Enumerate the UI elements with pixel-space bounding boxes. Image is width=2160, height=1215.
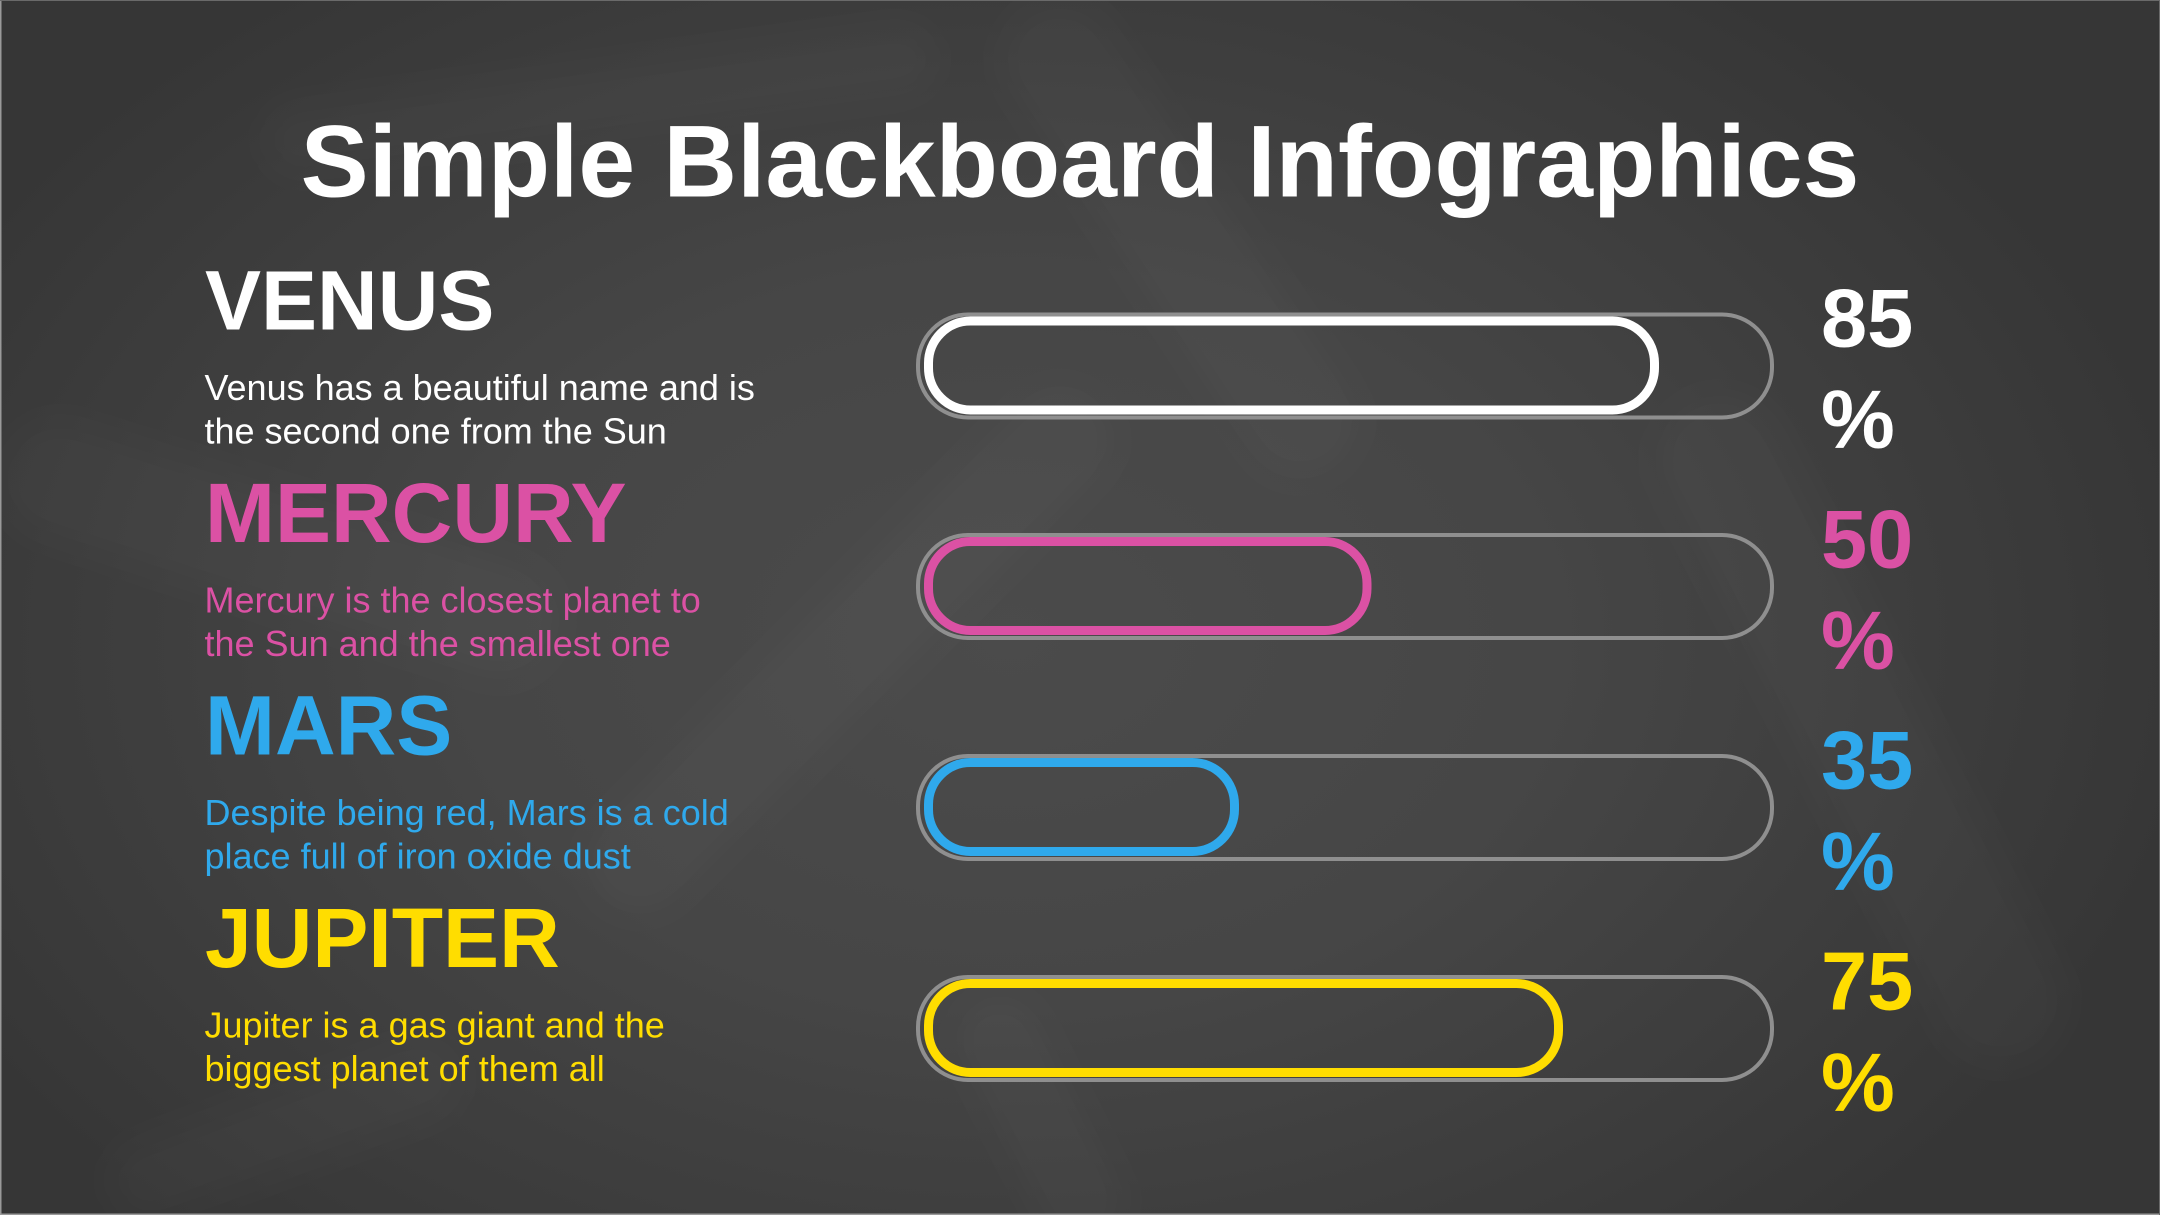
progress bar: Mars 35%: [918, 756, 1772, 859]
value: 85%: %: [1821, 373, 1895, 466]
description: Mars: place full of iron oxide dust: [204, 836, 631, 876]
value: 50%: %: [1821, 594, 1895, 687]
panel: Mars text: [204, 678, 729, 876]
panel: Jupiter text: [204, 891, 665, 1089]
description: Venus: the second one from the Sun: [204, 410, 667, 452]
value: 85%: 85: [1821, 272, 1913, 364]
heading: Venus: VENUS: [205, 254, 494, 348]
progress bar: Mercury 50%: [918, 535, 1772, 638]
description: Mercury: Mercury is the closest planet to: [204, 580, 701, 620]
description: Jupiter: Jupiter is a gas giant and the: [204, 1004, 665, 1046]
description: Mercury: the Sun and the smallest one: [204, 623, 671, 664]
heading: Jupiter: JUPITER: [205, 891, 560, 985]
description: Jupiter: biggest planet of them all: [204, 1048, 605, 1089]
title: Simple Blackboard Infographics: [301, 104, 1859, 218]
progress bar: Jupiter 75%: [918, 977, 1772, 1080]
description: Venus: Venus has a beautiful name and is: [204, 367, 755, 408]
value: 75%: 75: [1821, 934, 1913, 1028]
value: 50%: 50: [1821, 492, 1913, 586]
heading: Mars: MARS: [205, 678, 452, 772]
panel: Venus text: [204, 254, 755, 452]
heading: Mercury: MERCURY: [205, 466, 627, 560]
progress bar: Venus 85%: [918, 314, 1772, 418]
value: 75%: %: [1821, 1036, 1895, 1129]
panel: Mercury text: [204, 466, 701, 664]
description: Mars: Despite being red, Mars is a cold: [204, 792, 729, 833]
value: 35%: %: [1821, 815, 1895, 908]
value: 35%: 35: [1821, 714, 1913, 806]
